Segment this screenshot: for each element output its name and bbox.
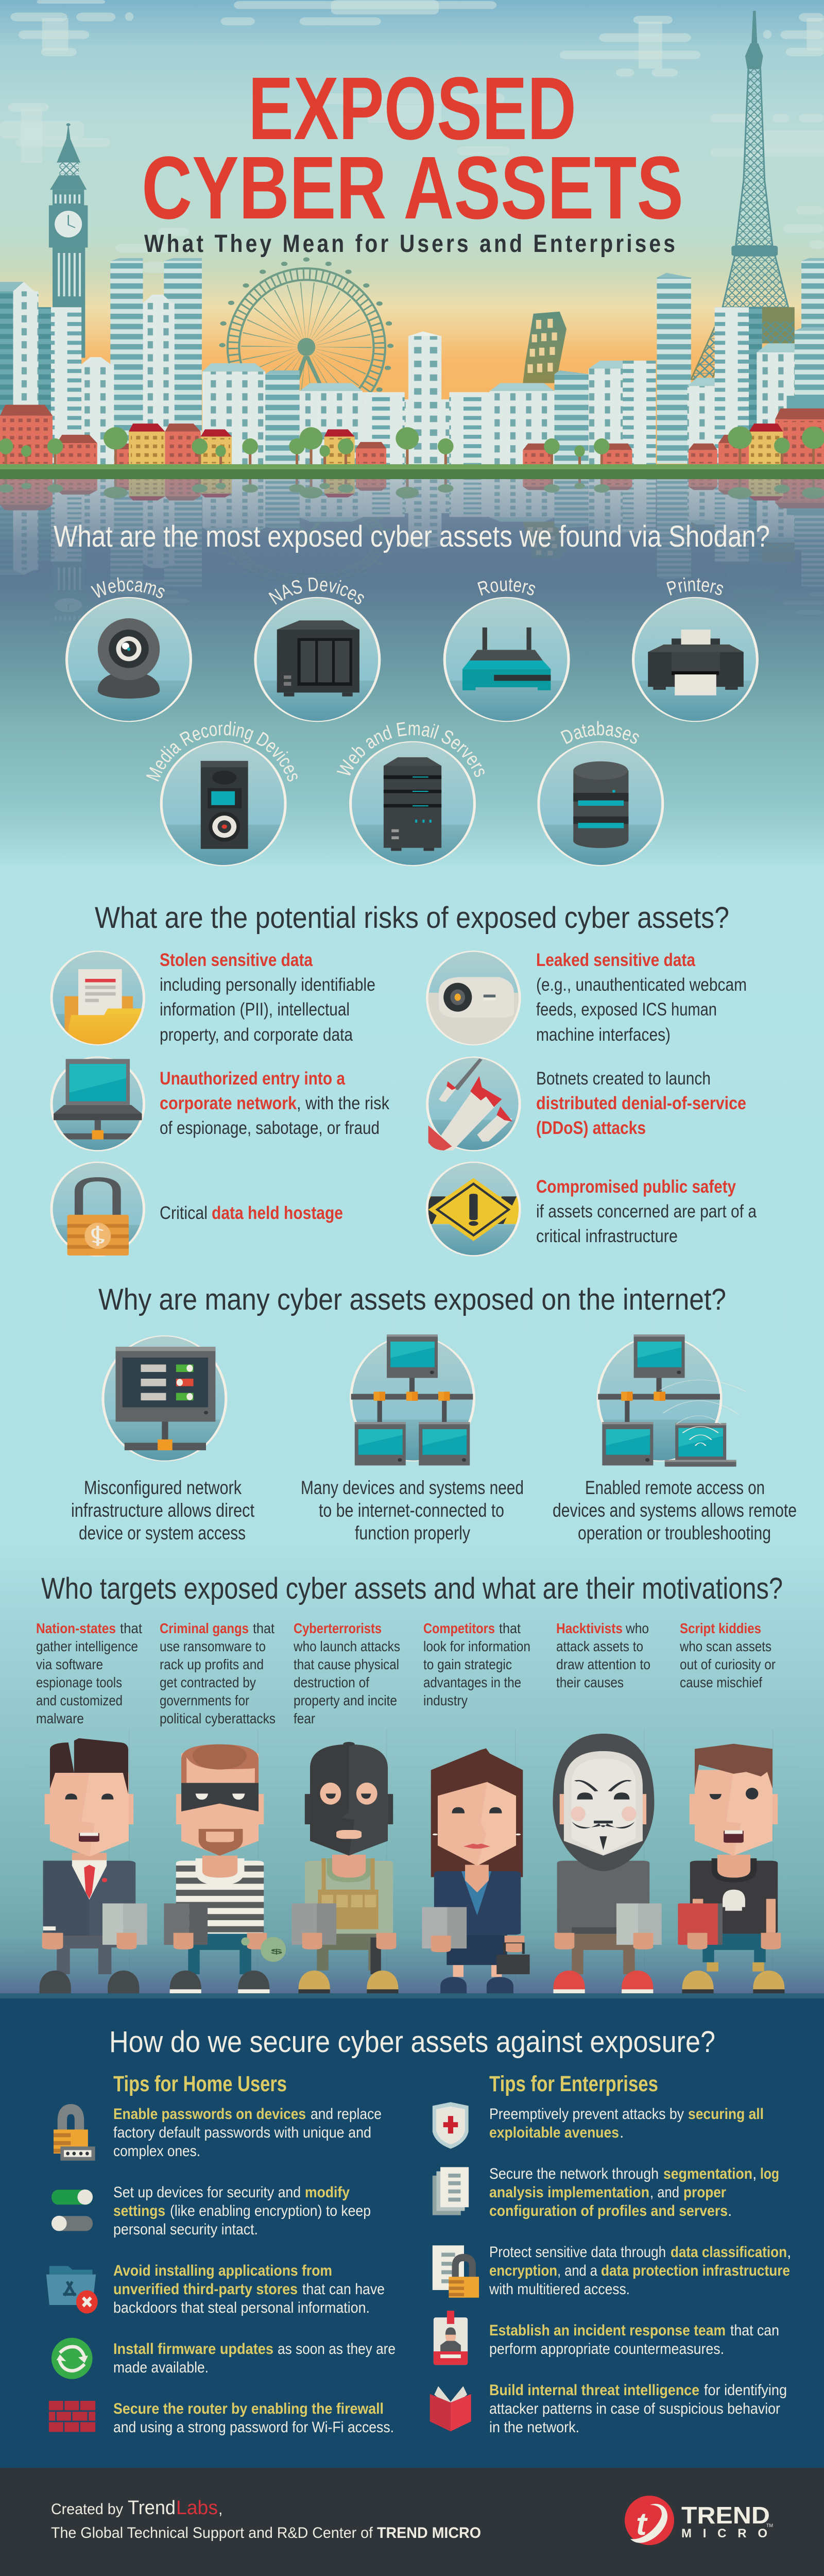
tip: settings: settings xyxy=(113,2202,165,2219)
label: databases: Databases xyxy=(560,721,639,744)
skyline illustration xyxy=(0,0,824,465)
footer credit: Labs xyxy=(176,2497,218,2519)
actor: nation-states xyxy=(36,1620,142,1726)
tip: applications: unverified third-party stores xyxy=(113,2281,298,2298)
home icons xyxy=(46,2109,98,2432)
actor: competitors: that xyxy=(499,1620,521,1636)
actor: nation-states: Nation-states xyxy=(36,1620,116,1636)
background: light section xyxy=(0,866,824,1994)
risk: public safety: critical infrastructure xyxy=(536,1226,678,1246)
tip: firmware: made available. xyxy=(113,2359,209,2376)
actor: cyberterrorists: fear xyxy=(294,1710,315,1726)
label: web and email servers: Web and Email Servers xyxy=(337,722,485,777)
reason text: misconfigured: device or system access xyxy=(79,1522,246,1544)
tip: preempt attacks: exploitable avenues xyxy=(489,2124,619,2141)
person: competitor xyxy=(422,1749,530,1993)
tip: protect data xyxy=(489,2244,791,2298)
tip: protect data: data protection infrastructure xyxy=(601,2262,790,2279)
background: sky xyxy=(0,0,824,466)
tip: secure the network: Secure the network through xyxy=(489,2165,659,2182)
footer credit: Created by xyxy=(51,2501,123,2518)
tip: router xyxy=(113,2400,394,2436)
person: criminal xyxy=(164,1744,286,1993)
risk: unauthorized entry xyxy=(160,1069,389,1138)
panel: exposed asset discs xyxy=(67,598,757,866)
label: media recording devices: Media Recording Devices xyxy=(146,721,298,782)
tip: router: Secure the router by enabling the firewall xyxy=(113,2400,384,2417)
tip: settings: Set up devices for security and xyxy=(113,2184,301,2201)
reason text: remote access xyxy=(553,1477,797,1544)
tip: settings: personal security intact. xyxy=(113,2221,258,2238)
actor: nation-states: malware xyxy=(36,1710,84,1726)
actor: criminal gangs: political cyberattacks xyxy=(160,1710,276,1726)
tip: secure the network: log xyxy=(760,2165,779,2182)
tip: secure the network: proper xyxy=(683,2184,726,2201)
risk: data hostage xyxy=(160,1203,343,1223)
tip: protect data: with multitiered access. xyxy=(489,2281,630,2298)
icon: protected document xyxy=(433,2245,479,2298)
tip: protect data: , and a xyxy=(557,2262,597,2279)
risk: leaked sensitive data: (e.g., unauthenticated webcam xyxy=(536,975,747,995)
actor: cyberterrorists: who launch attacks xyxy=(293,1638,400,1654)
icon: toggles xyxy=(52,2190,93,2231)
risk: botnets: (DDoS) attacks xyxy=(536,1118,646,1138)
person: criminal: $ xyxy=(271,1947,282,1956)
risk: stolen sensitive data: information (PII), intellectual xyxy=(160,999,350,1020)
risk: leaked sensitive data: feeds, exposed ICS human xyxy=(536,999,717,1020)
icon: webcam xyxy=(98,618,160,699)
footer credit: Trend xyxy=(128,2497,176,2519)
tip: settings: (like enabling encryption) to keep xyxy=(170,2202,371,2219)
reason text: internet-connected: Many devices and systems need xyxy=(301,1477,524,1498)
risk: public safety: Compromised public safety xyxy=(536,1177,736,1197)
houses xyxy=(0,405,824,465)
icon: documents xyxy=(433,2167,469,2215)
tip: protect data: encryption xyxy=(489,2262,557,2279)
actor: script kiddies: Script kiddies xyxy=(680,1620,761,1636)
tip: secure the network: , xyxy=(752,2165,757,2182)
tip: passwords: complex ones. xyxy=(113,2143,200,2160)
icon: password lock xyxy=(54,2109,95,2161)
tip: preempt attacks: securing all xyxy=(688,2106,764,2123)
risk: leaked sensitive data xyxy=(536,950,747,1045)
panel: security tips background xyxy=(0,1998,824,2468)
reason text: misconfigured xyxy=(71,1477,255,1544)
icon: padlock with dollar xyxy=(67,1179,129,1256)
ferris wheel pods xyxy=(219,257,393,392)
actor: criminal gangs: Criminal gangs xyxy=(160,1620,249,1636)
icon: laptop on network xyxy=(52,1059,144,1140)
risk icons xyxy=(52,951,521,1256)
tip: incident response xyxy=(489,2322,779,2358)
actor: hacktivists: Hacktivists xyxy=(556,1620,623,1636)
actor: criminal gangs xyxy=(160,1620,276,1726)
actor: cyberterrorists xyxy=(293,1620,400,1726)
tip: firmware: Install firmware updates xyxy=(113,2341,273,2358)
actor: cyberterrorists: property and incite xyxy=(294,1692,397,1708)
tip: threat intelligence: attacker patterns in case of suspicious behavior xyxy=(489,2400,780,2417)
footer credit: , xyxy=(218,2501,222,2518)
actor: script kiddies: who scan assets xyxy=(679,1638,771,1654)
person: cyberterrorist xyxy=(291,1742,398,1993)
icon: media recorder xyxy=(201,761,248,849)
icon: firewall xyxy=(49,2401,95,2432)
icon: connected monitors xyxy=(351,1334,473,1465)
heading: tips for home users: Tips for Home Users xyxy=(113,2072,287,2096)
tip: secure the network: analysis implementation xyxy=(489,2184,649,2201)
heading: tips for enterprises: Tips for Enterprises xyxy=(489,2072,658,2096)
actor: criminal gangs: that xyxy=(253,1620,274,1636)
risk: stolen sensitive data: including personally identifiable xyxy=(160,975,375,995)
characters illustration xyxy=(26,1729,799,1993)
actor: criminal gangs: get contracted by xyxy=(160,1674,256,1690)
risk: botnets: distributed denial-of-service xyxy=(536,1093,746,1113)
icon: ID badge xyxy=(434,2311,468,2365)
label: routers: Routers xyxy=(477,578,536,596)
tip: router: and using a strong password for Wi-Fi access. xyxy=(113,2419,394,2436)
tip: applications: that can have xyxy=(302,2281,385,2298)
tip: protect data: , xyxy=(787,2244,791,2261)
label: NAS devices: NAS Devices xyxy=(268,578,364,605)
reason text: remote access: operation or troubleshooting xyxy=(578,1522,771,1544)
actor: criminal gangs: governments for xyxy=(160,1692,249,1708)
tip: threat intelligence: Build internal threat intelligence xyxy=(489,2382,699,2399)
reason text: misconfigured: infrastructure allows direct xyxy=(71,1500,255,1521)
actor: nation-states: that xyxy=(120,1620,142,1636)
logo: Trend Micro: t xyxy=(636,2506,648,2542)
reason icons xyxy=(103,1334,746,1467)
actor: competitors: industry xyxy=(423,1692,468,1708)
actor: cyberterrorists: destruction of xyxy=(294,1674,369,1690)
tip: threat intelligence: in the network. xyxy=(489,2419,579,2436)
tip: secure the network xyxy=(489,2165,779,2219)
tip: passwords: factory default passwords with unique and xyxy=(113,2124,371,2141)
actor: competitors xyxy=(423,1620,530,1708)
risk: botnets: Botnets created to launch xyxy=(536,1069,711,1089)
logo: Trend Micro: TREND xyxy=(681,2502,770,2529)
label: printers: Printers xyxy=(666,577,723,596)
actor: criminal gangs: use ransomware to xyxy=(160,1638,266,1654)
risk: stolen sensitive data xyxy=(160,950,375,1045)
risk: unauthorized entry: corporate network xyxy=(160,1093,297,1113)
landmark: Pisa tower xyxy=(523,312,566,383)
tip: protect data: Protect sensitive data through xyxy=(489,2244,666,2261)
reason text: internet-connected: to be internet-connected to xyxy=(319,1500,504,1521)
actor: hacktivists: who xyxy=(625,1620,649,1636)
icon: NAS device xyxy=(277,620,359,697)
tip: preempt attacks: Preemptively prevent attacks by xyxy=(489,2106,684,2123)
ground strip xyxy=(0,464,824,479)
logo: Trend Micro xyxy=(625,2496,773,2545)
subtitle: What They Mean for Users and Enterprises xyxy=(144,230,678,258)
tip: applications: Avoid installing applications from xyxy=(113,2262,332,2279)
clouds xyxy=(0,0,824,273)
tip: applications xyxy=(113,2262,385,2316)
actor: script kiddies xyxy=(679,1620,776,1690)
icon: router xyxy=(462,628,551,690)
risk: data hostage: data held hostage xyxy=(212,1203,343,1223)
icon: webcam close-up xyxy=(426,977,520,1045)
reason text: internet-connected xyxy=(301,1477,524,1544)
actor: hacktivists: draw attention to xyxy=(556,1656,650,1672)
person: hacktivist xyxy=(553,1734,662,1993)
landmark: Ferris wheel xyxy=(228,268,385,426)
tip: threat intelligence xyxy=(489,2382,787,2436)
tip: secure the network: segmentation xyxy=(663,2165,752,2182)
actor: hacktivists: attack assets to xyxy=(556,1638,643,1654)
footer credit: The Global Technical Support and R&D Center of xyxy=(51,2524,373,2541)
actor: competitors: to gain strategic xyxy=(423,1656,512,1672)
tip: passwords: Enable passwords on devices xyxy=(113,2106,306,2123)
logo: Trend Micro: TM xyxy=(766,2523,773,2528)
logo: Trend Micro: MICRO xyxy=(681,2527,767,2540)
tip: secure the network: , and xyxy=(650,2184,679,2201)
footer background xyxy=(0,2468,824,2576)
actor: nation-states: gather intelligence xyxy=(36,1638,138,1654)
tip: firmware xyxy=(113,2341,396,2376)
tip: incident response: Establish an incident response team xyxy=(489,2322,726,2339)
icon: blocked app folder xyxy=(46,2266,98,2313)
tip: secure the network: . xyxy=(728,2202,732,2219)
landmark: Eiffel Tower xyxy=(691,11,795,380)
tip: settings xyxy=(113,2184,371,2238)
heading: why exposed: Why are many cyber assets exposed on the internet? xyxy=(98,1283,726,1316)
actor: script kiddies: cause mischief xyxy=(680,1674,762,1690)
tip: protect data: data classification xyxy=(671,2244,787,2261)
footer credit xyxy=(51,2497,481,2541)
tip: secure the network: configuration of profiles and servers xyxy=(489,2202,728,2219)
footer credit: TREND MICRO xyxy=(377,2524,481,2541)
icon: warning sign xyxy=(428,1178,519,1241)
trees xyxy=(0,427,824,464)
icon: refresh xyxy=(52,2338,93,2379)
risk: leaked sensitive data: machine interfaces) xyxy=(536,1025,671,1045)
icon: servers xyxy=(384,757,441,851)
actor: competitors: advantages in the xyxy=(423,1674,521,1690)
risk: data hostage: Critical xyxy=(160,1203,208,1223)
icon: printer xyxy=(648,630,744,696)
actor: hacktivists xyxy=(556,1620,650,1690)
tip: incident response: that can xyxy=(730,2322,779,2339)
icon: book xyxy=(430,2386,471,2431)
heading: secure: How do we secure cyber assets against exposure? xyxy=(109,2025,715,2059)
actor: competitors: Competitors xyxy=(423,1620,495,1636)
dark band xyxy=(0,1993,824,1998)
risk: public safety: if assets concerned are part of a xyxy=(536,1201,757,1222)
tip: firmware: as soon as they are xyxy=(278,2341,396,2358)
tip: threat intelligence: for identifying xyxy=(704,2382,787,2399)
tip: incident response: perform appropriate countermeasures. xyxy=(489,2341,724,2358)
actor: cyberterrorists: that cause physical xyxy=(294,1656,399,1672)
enterprise icons xyxy=(430,2102,479,2431)
landmark: Big Ben xyxy=(49,123,88,358)
risk: unauthorized entry: of espionage, sabotage, or fraud xyxy=(160,1118,380,1138)
actor: nation-states: via software xyxy=(36,1656,103,1672)
actor: cyberterrorists: Cyberterrorists xyxy=(294,1620,382,1636)
tip: applications: backdoors that steal personal information. xyxy=(113,2299,370,2316)
title xyxy=(142,58,683,238)
title: CYBER ASSETS xyxy=(142,138,683,238)
tip: preempt attacks: . xyxy=(620,2124,624,2141)
icon: folder with document xyxy=(65,969,143,1047)
actor: script kiddies: out of curiosity or xyxy=(680,1656,776,1672)
towers and buildings xyxy=(0,258,824,465)
actor: hacktivists: their causes xyxy=(556,1674,624,1690)
risk: stolen sensitive data: property, and corporate data xyxy=(160,1025,353,1045)
reason text: internet-connected: function properly xyxy=(355,1522,470,1544)
risk: leaked sensitive data: Leaked sensitive data xyxy=(536,950,695,970)
risk: unauthorized entry: Unauthorized entry into a xyxy=(160,1069,345,1089)
risk: unauthorized entry: , with the risk xyxy=(297,1093,389,1113)
risk: botnets xyxy=(536,1069,746,1138)
icon: shield xyxy=(433,2102,469,2149)
person: script kiddie xyxy=(678,1744,784,1993)
heading: risks: What are the potential risks of exposed cyber assets? xyxy=(95,901,729,935)
water reflection of skyline xyxy=(0,479,824,620)
reason text: remote access: Enabled remote access on xyxy=(585,1477,765,1498)
tip: passwords xyxy=(113,2106,382,2160)
icon: control panel xyxy=(115,1347,215,1450)
reason text: misconfigured: Misconfigured network xyxy=(84,1477,242,1498)
icon: remote access xyxy=(598,1334,746,1467)
label: webcams: Webcams xyxy=(91,577,165,598)
tip: preempt attacks xyxy=(489,2106,764,2141)
actor: nation-states: espionage tools xyxy=(36,1674,122,1690)
tip: passwords: and replace xyxy=(311,2106,382,2123)
risk: public safety xyxy=(536,1177,757,1246)
icon: database xyxy=(573,761,628,848)
risk: stolen sensitive data: Stolen sensitive data xyxy=(160,950,313,970)
tip: settings: modify xyxy=(305,2184,350,2201)
title: EXPOSED xyxy=(248,58,576,158)
background: water xyxy=(0,479,824,866)
actor: nation-states: and customized xyxy=(36,1692,123,1708)
actor: criminal gangs: rack up profits and xyxy=(160,1656,264,1672)
icon: missiles xyxy=(428,1058,512,1150)
person: nation-state agent xyxy=(40,1738,147,1993)
actor: competitors: look for information xyxy=(423,1638,530,1654)
